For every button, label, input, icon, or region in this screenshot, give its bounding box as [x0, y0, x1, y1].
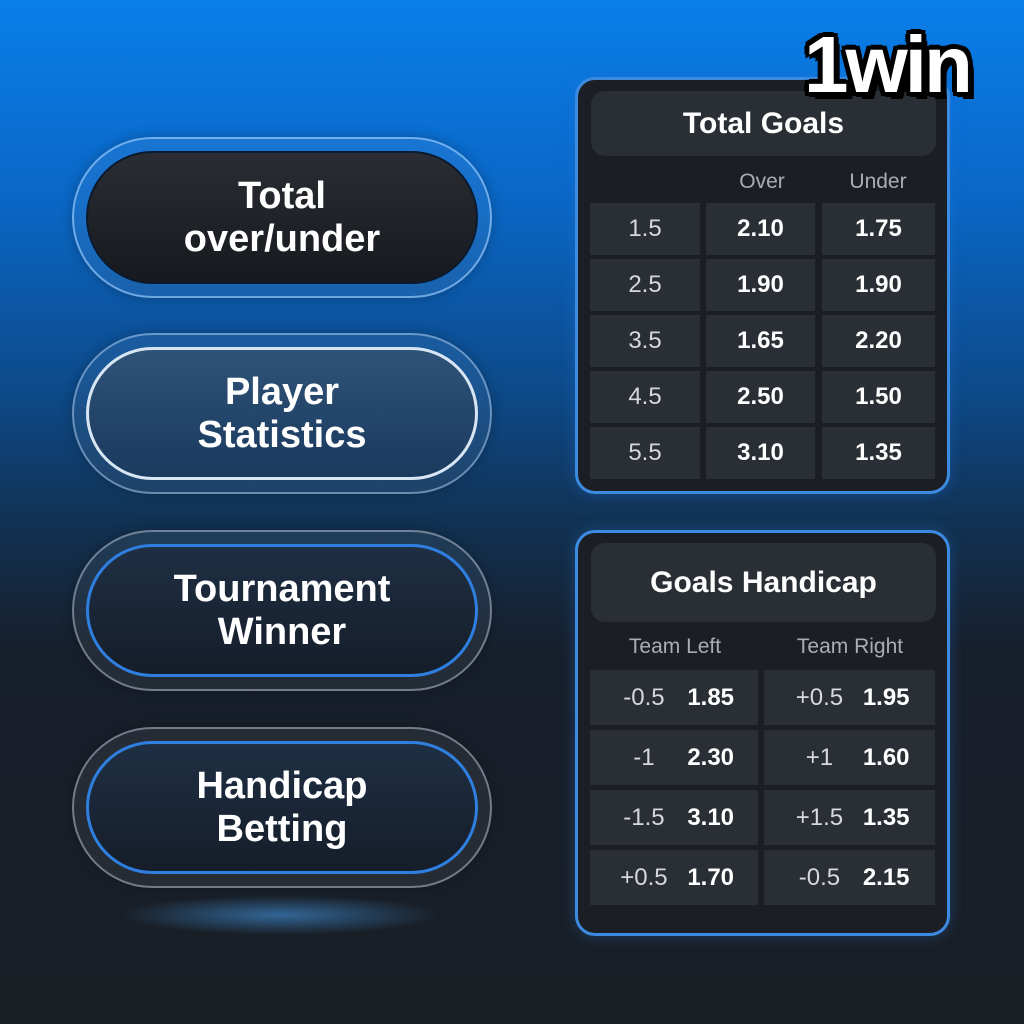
pill: Player Statistics: [72, 333, 492, 494]
rows: 1.5: [628, 215, 662, 242]
rows: 2.5: [628, 271, 662, 298]
column labels: Team Right: [797, 635, 903, 658]
rows: 1.90: [737, 271, 784, 298]
rows: -1: [633, 744, 655, 770]
label: Betting: [217, 808, 347, 850]
rows: 1.95: [863, 684, 910, 710]
label: Handicap: [196, 764, 368, 806]
rows: 1.50: [855, 383, 902, 410]
rows: 2.50: [737, 383, 784, 410]
heading: Total Goals: [683, 106, 844, 140]
column labels: Team Left: [629, 635, 721, 658]
rows: 2.20: [855, 327, 902, 354]
rows: +0.5: [620, 864, 668, 890]
rows: 1.75: [855, 215, 902, 242]
rows: +1.5: [796, 804, 843, 830]
glow under pills: [120, 895, 440, 935]
label: Player: [225, 370, 339, 412]
rows: -0.5: [799, 864, 840, 890]
label: [86, 741, 478, 874]
pill: Total over/under: [72, 137, 492, 298]
pill: Handicap Betting: [72, 727, 492, 888]
heading: Goals Handicap: [650, 566, 877, 598]
column labels: [629, 635, 903, 658]
rows: 2.30: [687, 744, 734, 770]
rows: 1.65: [737, 327, 784, 354]
rows: 4.5: [628, 383, 662, 410]
rows: +0.5: [796, 684, 843, 710]
logo: 1win: 1win: [804, 20, 970, 109]
panel: Goals Handicap: [575, 530, 950, 936]
label: Tournament: [174, 568, 390, 610]
rows: 1.35: [863, 804, 910, 830]
column labels: Over: [739, 170, 785, 193]
rows: -1.5: [623, 804, 665, 830]
rows: 1.90: [855, 271, 902, 298]
rows: [590, 203, 935, 479]
rows: -0.5: [623, 684, 665, 710]
rows: 1.85: [687, 684, 734, 710]
label: Statistics: [198, 414, 366, 456]
rows: 3.10: [737, 439, 784, 466]
label: Total: [238, 174, 326, 216]
label: [86, 544, 478, 677]
rows: 2.15: [863, 864, 910, 890]
label: Winner: [218, 610, 346, 652]
rows: 1.60: [863, 744, 910, 770]
rows: 1.35: [855, 439, 902, 466]
column labels: [739, 170, 907, 193]
rows: 2.10: [737, 215, 784, 242]
heading: [591, 543, 936, 622]
heading: [591, 91, 936, 156]
rows: 3.5: [628, 327, 662, 354]
rows: +1: [806, 744, 833, 770]
rows: [590, 670, 935, 905]
column labels: Under: [849, 170, 907, 193]
panel: Total Goals: [575, 77, 950, 494]
rows: 3.10: [687, 804, 734, 830]
label: over/under: [184, 218, 380, 260]
rows: 5.5: [628, 439, 662, 466]
label: [86, 347, 478, 480]
label: [86, 151, 478, 284]
rows: 1.70: [687, 864, 734, 890]
pill: Tournament Winner: [72, 530, 492, 691]
